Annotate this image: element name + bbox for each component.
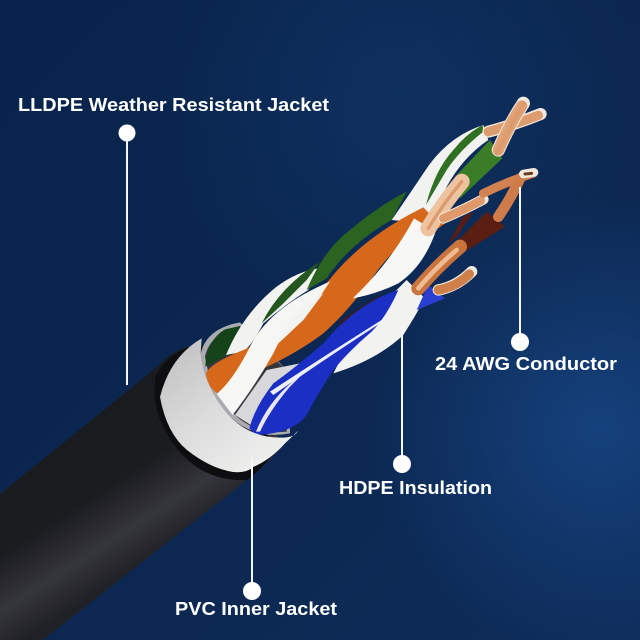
blue and white pair (249, 280, 445, 435)
callout: LLDPE jacket (18, 95, 329, 385)
inner jacket front (160, 338, 298, 472)
brown wire (448, 212, 505, 252)
copper conductors (418, 103, 541, 290)
callout: PVC inner jacket (175, 457, 337, 619)
callout: LLDPE jacket: LLDPE Weather Resistant Jacket (18, 95, 329, 115)
callout: HDPE insulation (339, 335, 492, 498)
cable opening interior (201, 322, 300, 435)
white/green back pair (226, 125, 502, 355)
callout: PVC inner jacket: PVC Inner Jacket (175, 599, 337, 619)
callout: 24 AWG conductor: 24 AWG Conductor (435, 354, 617, 374)
orange and white pair (206, 207, 445, 415)
cable illustration (0, 103, 541, 640)
callout: HDPE insulation: HDPE Insulation (339, 478, 492, 498)
black outer jacket (0, 345, 283, 640)
callout: 24 AWG conductor (435, 187, 617, 374)
